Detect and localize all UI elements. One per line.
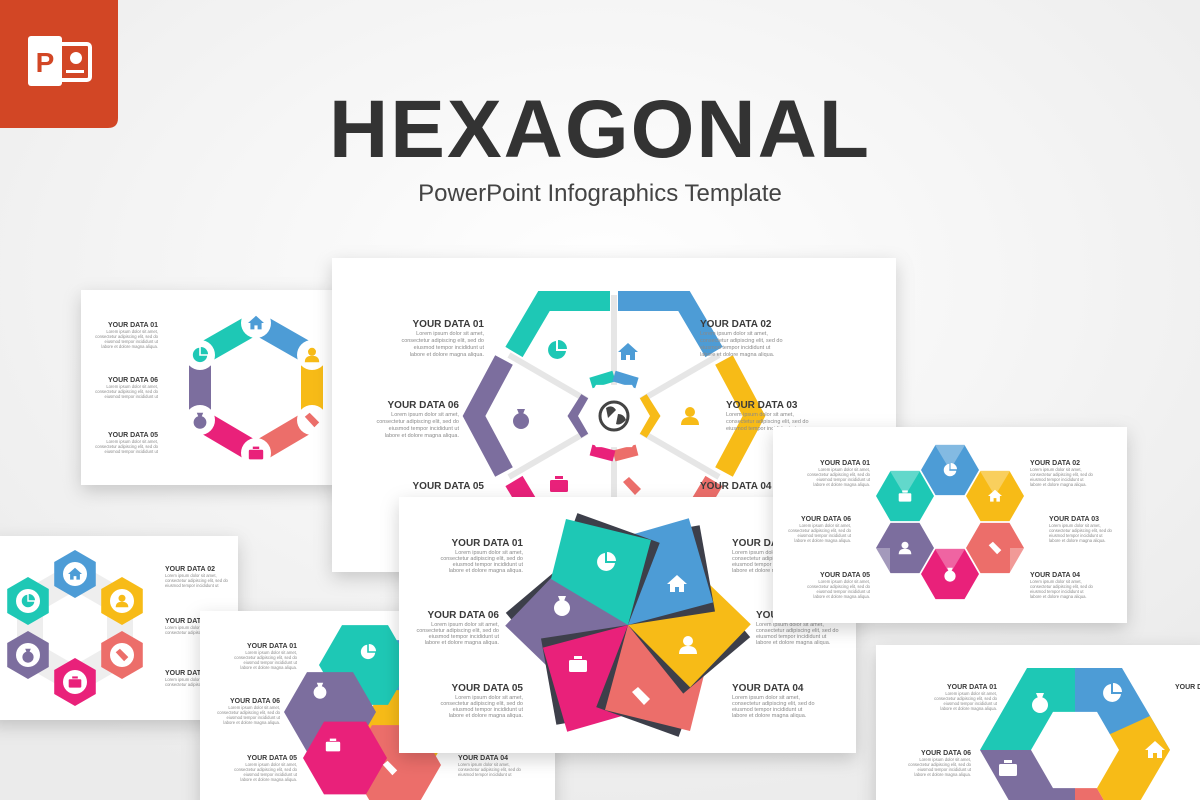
- slide A: hexagon ring with circles: consectetur adipiscing elit, sed do: [95, 334, 159, 339]
- icon: powerpoint logo: [0, 0, 118, 128]
- slide E: overlapping hexagons: YOUR DATA 05: [247, 755, 297, 762]
- slide A: hexagon ring with circles: YOUR DATA 01: [108, 322, 158, 329]
- slide A: hexagon ring with circles: consectetur adipiscing elit, sed do: [95, 444, 159, 449]
- slide F: pinwheel of squares: labore et dolore magna aliqua.: [732, 713, 807, 719]
- slide F: pinwheel of squares: Lorem ipsum dolor sit amet,: [431, 622, 499, 628]
- slide F: pinwheel of squares: eiusmod tempor incididunt ut: [732, 707, 803, 713]
- slide E: overlapping hexagons: Lorem ipsum dolor sit amet,: [458, 762, 510, 767]
- slide E: overlapping hexagons: labore et dolore magna aliqua.: [223, 720, 280, 725]
- slide A: hexagon ring with circles: YOUR DATA 06: [108, 377, 158, 384]
- slide F: pinwheel of squares: YOUR DATA 03: [756, 610, 828, 621]
- slide C: honeycomb cluster: eiusmod tempor incididunt ut: [1049, 533, 1103, 538]
- slide F: pinwheel of squares: eiusmod tempor incididunt ut: [429, 634, 499, 640]
- slide G: big hexagon ring: eiusmod tempor incididunt ut: [943, 701, 998, 706]
- slide E: overlapping hexagons: Lorem ipsum dolor sit amet,: [245, 650, 297, 655]
- slide F: pinwheel of squares: YOUR DATA 05: [452, 683, 523, 694]
- slide G: big hexagon ring: [876, 645, 1200, 800]
- slide B: segmented hexagon: consectetur adipiscing elit, sed do: [401, 338, 484, 344]
- slide C: honeycomb cluster: Lorem ipsum dolor sit amet,: [799, 523, 851, 528]
- slide F: pinwheel of squares: Lorem ipsum dolor sit amet,: [732, 695, 800, 701]
- slide F: pinwheel of squares: consectetur adipiscing elit, sed do: [440, 701, 523, 707]
- slide B: segmented hexagon: YOUR DATA 06: [388, 400, 459, 411]
- slide A: hexagon ring with circles: Lorem ipsum dolor sit amet,: [106, 384, 158, 389]
- slide B: segmented hexagon: eiusmod tempor incididunt ut: [700, 345, 771, 351]
- slide B: segmented hexagon: eiusmod tempor incididunt ut: [414, 345, 484, 351]
- slide F: pinwheel of squares: Lorem ipsum dolor sit amet,: [732, 550, 800, 556]
- slide B: segmented hexagon: Lorem ipsum dolor sit amet,: [700, 331, 768, 337]
- slide F: pinwheel of squares: eiusmod tempor incididunt ut: [756, 634, 827, 640]
- slide C: honeycomb cluster: YOUR DATA 02: [1030, 460, 1080, 467]
- slide D: hexagon ring left: YOUR DATA 02: [165, 566, 215, 573]
- slide F: pinwheel of squares: Lorem ipsum dolor sit amet,: [756, 622, 824, 628]
- slide C: honeycomb cluster: YOUR DATA 03: [1049, 516, 1099, 523]
- slide C: honeycomb cluster: consectetur adipiscing elit, sed do: [807, 472, 871, 477]
- slide E: overlapping hexagons: eiusmod tempor incididunt ut: [226, 715, 281, 720]
- slide E: overlapping hexagons: consectetur adipiscing elit, sed do: [217, 710, 281, 715]
- slide C: honeycomb cluster: eiusmod tempor incididunt ut: [816, 477, 871, 482]
- title: HEXAGONAL: [329, 84, 871, 175]
- slide C: honeycomb cluster: YOUR DATA 06: [801, 516, 851, 523]
- slide C: honeycomb cluster: YOUR DATA 05: [820, 572, 870, 579]
- slide B: segmented hexagon: [332, 258, 896, 572]
- slide C: honeycomb cluster: YOUR DATA 04: [1030, 572, 1080, 579]
- slide C: honeycomb cluster: labore et dolore magna aliqua.: [1030, 482, 1087, 487]
- icon: globe: [600, 402, 628, 430]
- slide D: hexagon ring left: consectetur adipiscing elit, sed do: [165, 682, 229, 687]
- slide G: big hexagon ring: consectetur adipiscing elit, sed do: [934, 696, 998, 701]
- slide F: pinwheel of squares: Lorem ipsum dolor sit amet,: [455, 695, 523, 701]
- slide F: pinwheel of squares: eiusmod tempor incididunt ut: [453, 707, 523, 713]
- slide E: overlapping hexagons: Lorem ipsum dolor sit amet,: [245, 762, 297, 767]
- slide C: honeycomb cluster: consectetur adipiscing elit, sed do: [1030, 472, 1094, 477]
- slide E: overlapping hexagons: consectetur adipiscing elit, sed do: [234, 655, 298, 660]
- slide B: segmented hexagon: consectetur adipiscing elit, sed do: [376, 419, 459, 425]
- slide B: segmented hexagon: YOUR DATA 05: [412, 481, 484, 492]
- slide A: hexagon ring with circles: Lorem ipsum dolor sit amet,: [106, 439, 158, 444]
- slide F: pinwheel of squares: consectetur adipiscing elit, sed do: [416, 628, 499, 634]
- slide G: big hexagon ring: Lorem ipsum dolor sit amet,: [919, 757, 971, 762]
- slide C: honeycomb cluster: consectetur adipiscing elit, sed do: [1030, 584, 1094, 589]
- slide C: honeycomb cluster: labore et dolore magna aliqua.: [1030, 594, 1087, 599]
- slide B: segmented hexagon: labore et dolore magna aliqua.: [410, 352, 484, 358]
- slide F: pinwheel of squares: consectetur adipiscing elit, sed do: [732, 701, 815, 707]
- slide A: hexagon ring with circles: YOUR DATA 05: [108, 432, 158, 439]
- slide E: overlapping hexagons: eiusmod tempor incididunt ut: [458, 772, 512, 777]
- slide E: overlapping hexagons: eiusmod tempor incididunt ut: [243, 660, 298, 665]
- slide C: honeycomb cluster: eiusmod tempor incididunt ut: [1030, 589, 1084, 594]
- slide E: overlapping hexagons: Lorem ipsum dolor sit amet,: [228, 705, 280, 710]
- slide C: honeycomb cluster: Lorem ipsum dolor sit amet,: [818, 579, 870, 584]
- slide C: honeycomb cluster: Lorem ipsum dolor sit amet,: [1030, 579, 1082, 584]
- slide G: big hexagon ring: Lorem ipsum dolor sit amet,: [945, 691, 997, 696]
- slide A: hexagon ring with circles: eiusmod tempor incididunt ut: [104, 394, 159, 399]
- slide C: honeycomb cluster: consectetur adipiscing elit, sed do: [807, 584, 871, 589]
- slide F: pinwheel of squares: [399, 497, 856, 753]
- slide B: segmented hexagon: YOUR DATA 03: [726, 400, 798, 411]
- slide A: hexagon ring with circles: [81, 290, 341, 485]
- slide F: pinwheel of squares: labore et dolore magna aliqua.: [449, 568, 523, 574]
- slide C: honeycomb cluster: Lorem ipsum dolor sit amet,: [1049, 523, 1101, 528]
- slide E: overlapping hexagons: labore et dolore magna aliqua.: [240, 777, 297, 782]
- slide G: big hexagon ring: eiusmod tempor incididunt ut: [917, 767, 972, 772]
- slide D: hexagon ring left: consectetur adipiscing elit, sed do: [165, 578, 229, 583]
- slide D: hexagon ring left: [0, 536, 238, 720]
- slide G: big hexagon ring: labore et dolore magna aliqua.: [914, 772, 971, 777]
- slide C: honeycomb cluster: Lorem ipsum dolor sit amet,: [1030, 467, 1082, 472]
- slide F: pinwheel of squares: consectetur adipiscing elit, sed do: [732, 556, 815, 562]
- slide A: hexagon ring with circles: eiusmod tempor incididunt ut: [104, 339, 159, 344]
- slide D: hexagon ring left: Lorem ipsum dolor sit amet,: [165, 573, 217, 578]
- slide A: hexagon ring with circles: Lorem ipsum dolor sit amet,: [106, 329, 158, 334]
- slide F: pinwheel of squares: labore et dolore magna aliqua.: [756, 640, 831, 646]
- slide D: hexagon ring left: Lorem ipsum dolor sit amet,: [165, 625, 217, 630]
- slide F: pinwheel of squares: YOUR DATA 02: [732, 538, 804, 549]
- slide C: honeycomb cluster: eiusmod tempor incididunt ut: [797, 533, 852, 538]
- slide F: pinwheel of squares: labore et dolore magna aliqua.: [425, 640, 499, 646]
- slide B: segmented hexagon: YOUR DATA 01: [412, 319, 484, 330]
- slide F: pinwheel of squares: eiusmod tempor incididunt ut: [732, 562, 803, 568]
- slide E: overlapping hexagons: YOUR DATA 06: [230, 698, 280, 705]
- slide E: overlapping hexagons: [200, 611, 555, 800]
- slide C: honeycomb cluster: eiusmod tempor incididunt ut: [1030, 477, 1084, 482]
- slide G: big hexagon ring: labore et dolore magna aliqua.: [940, 706, 997, 711]
- slide D: hexagon ring left: consectetur adipiscing elit, sed do: [165, 630, 229, 635]
- slide G: big hexagon ring: consectetur adipiscing elit, sed do: [908, 762, 972, 767]
- slide B: segmented hexagon: eiusmod tempor incididunt ut: [389, 426, 459, 432]
- slide C: honeycomb cluster: labore et dolore magna aliqua.: [813, 482, 870, 487]
- slide B: segmented hexagon: Lorem ipsum dolor sit amet,: [391, 412, 459, 418]
- slide A: hexagon ring with circles: consectetur adipiscing elit, sed do: [95, 389, 159, 394]
- slide B: segmented hexagon: labore et dolore magna aliqua.: [385, 433, 459, 439]
- slide C: honeycomb cluster: Lorem ipsum dolor sit amet,: [818, 467, 870, 472]
- slide C: honeycomb cluster: labore et dolore magna aliqua.: [1049, 538, 1106, 543]
- slide B: segmented hexagon: YOUR DATA 02: [700, 319, 772, 330]
- slide C: honeycomb cluster: [773, 427, 1127, 623]
- slide G: big hexagon ring: YOUR DATA 01: [947, 684, 997, 691]
- slide F: pinwheel of squares: labore et dolore magna aliqua.: [732, 568, 807, 574]
- slide C: honeycomb cluster: labore et dolore magna aliqua.: [813, 594, 870, 599]
- slide C: honeycomb cluster: eiusmod tempor incididunt ut: [816, 589, 871, 594]
- slide E: overlapping hexagons: eiusmod tempor incididunt ut: [243, 772, 298, 777]
- slide D: hexagon ring left: YOUR DATA 03: [165, 618, 215, 625]
- slide F: pinwheel of squares: Lorem ipsum dolor sit amet,: [455, 550, 523, 556]
- slide A: hexagon ring with circles: labore et dolore magna aliqua.: [101, 344, 158, 349]
- slide B: segmented hexagon: YOUR DATA 04: [700, 481, 772, 492]
- subtitle: PowerPoint Infographics Template: [418, 180, 782, 207]
- slide D: hexagon ring left: YOUR DATA 04: [165, 670, 215, 677]
- slide C: honeycomb cluster: YOUR DATA 01: [820, 460, 870, 467]
- slide F: pinwheel of squares: eiusmod tempor incididunt ut: [453, 562, 523, 568]
- slide E: overlapping hexagons: labore et dolore magna aliqua.: [240, 665, 297, 670]
- slide F: pinwheel of squares: YOUR DATA 04: [732, 683, 804, 694]
- slide F: pinwheel of squares: labore et dolore magna aliqua.: [449, 713, 523, 719]
- slide C: honeycomb cluster: consectetur adipiscing elit, sed do: [1049, 528, 1113, 533]
- slide A: hexagon ring with circles: eiusmod tempor incididunt ut: [104, 449, 159, 454]
- icon: powerpoint logo: P: [36, 47, 54, 78]
- slide F: pinwheel of squares: YOUR DATA 06: [428, 610, 499, 621]
- slide F: pinwheel of squares: YOUR DATA 01: [452, 538, 523, 549]
- slide G: big hexagon ring: YOUR DATA 06: [921, 750, 971, 757]
- slide B: segmented hexagon: Lorem ipsum dolor sit amet,: [726, 412, 794, 418]
- slide D: hexagon ring left: eiusmod tempor incididunt ut: [165, 583, 219, 588]
- slide B: segmented hexagon: labore et dolore magna aliqua.: [700, 352, 775, 358]
- slide B: segmented hexagon: eiusmod tempor incididunt ut: [726, 426, 797, 432]
- slide F: pinwheel of squares: consectetur adipiscing elit, sed do: [440, 556, 523, 562]
- slide C: honeycomb cluster: consectetur adipiscing elit, sed do: [788, 528, 852, 533]
- slide E: overlapping hexagons: consectetur adipiscing elit, sed do: [458, 767, 522, 772]
- slide C: honeycomb cluster: labore et dolore magna aliqua.: [794, 538, 851, 543]
- slide F: pinwheel of squares: consectetur adipiscing elit, sed do: [756, 628, 839, 634]
- slide B: segmented hexagon: Lorem ipsum dolor sit amet,: [416, 331, 484, 337]
- slide E: overlapping hexagons: YOUR DATA 04: [458, 755, 508, 762]
- slide B: segmented hexagon: consectetur adipiscing elit, sed do: [726, 419, 809, 425]
- slide B: segmented hexagon: consectetur adipiscing elit, sed do: [700, 338, 783, 344]
- slide E: overlapping hexagons: consectetur adipiscing elit, sed do: [234, 767, 298, 772]
- slide E: overlapping hexagons: YOUR DATA 01: [247, 643, 297, 650]
- slide D: hexagon ring left: Lorem ipsum dolor sit amet,: [165, 677, 217, 682]
